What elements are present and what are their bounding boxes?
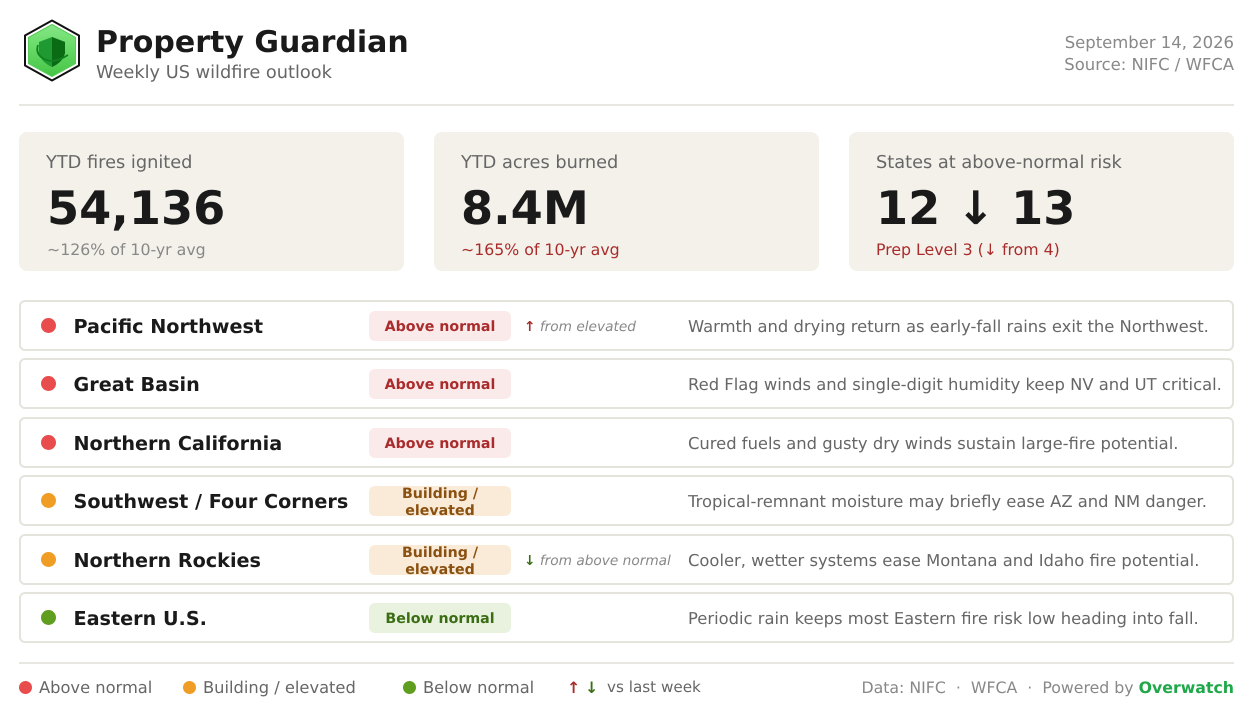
- footer: [19, 662, 1234, 716]
- label: States at above-normal risk: [876, 152, 1122, 172]
- status pill: Building /: [402, 544, 478, 560]
- legend label: Above normal: [39, 678, 152, 697]
- region name: Northern Rockies: [74, 549, 261, 572]
- legend dot: [183, 681, 196, 694]
- date and source: September 14, 2026: [1065, 33, 1234, 52]
- legend dot: [19, 681, 32, 694]
- status dot: [41, 493, 56, 508]
- row: Pacific Northwest: [19, 300, 1234, 351]
- legend dot: [403, 681, 416, 694]
- legend label: Below normal: [423, 678, 534, 697]
- subtitle: Weekly US wildfire outlook: [96, 63, 332, 83]
- status pill: Above normal: [385, 436, 495, 452]
- region name: Northern California: [74, 432, 282, 455]
- arrow down: ↓: [585, 678, 598, 697]
- status pill: [369, 486, 511, 516]
- status dot: [41, 435, 56, 450]
- label: YTD fires ignited: [46, 152, 192, 172]
- legend: below normal: [403, 678, 534, 697]
- panel: YTD fires ignited: [19, 132, 404, 271]
- status pill: elevated: [405, 562, 475, 578]
- status pill: elevated: [405, 502, 475, 518]
- header: [19, 15, 1234, 106]
- status pill: Building /: [402, 486, 478, 502]
- date and source: Source: NIFC / WFCA: [1064, 55, 1234, 74]
- status dot: [41, 318, 56, 333]
- title: Property Guardian: [96, 24, 409, 60]
- description: Periodic rain keeps most Eastern fire risk low heading into fall.: [688, 609, 1199, 628]
- legend: above normal: [19, 678, 152, 697]
- status pill: Below normal: [385, 611, 495, 627]
- value: 54,136: [47, 181, 225, 235]
- row: Great Basin: [19, 358, 1234, 409]
- row: Southwest / Four Corners: [19, 475, 1234, 526]
- row: Eastern U.S.: [19, 592, 1234, 643]
- legend: change arrows: [567, 678, 701, 697]
- region name: Pacific Northwest: [74, 315, 263, 338]
- panel: States at above-normal risk: [849, 132, 1234, 271]
- arrow up: ↑: [567, 678, 580, 697]
- legend: building: [183, 678, 356, 697]
- note: Prep Level 3 (↓ from 4): [876, 240, 1060, 259]
- label: YTD acres burned: [461, 152, 618, 172]
- status pill: [369, 428, 511, 458]
- status pill: [369, 603, 511, 633]
- change note: ↑ from elevated: [524, 318, 636, 334]
- note: ~126% of 10-yr avg: [47, 240, 206, 259]
- value: 12 ↓ 13: [876, 181, 1075, 235]
- description: Warmth and drying return as early-fall rains exit the Northwest.: [688, 317, 1209, 336]
- footer credits: Data: NIFC · WFCA · Powered by Overwatch: [861, 678, 1234, 697]
- status dot: [41, 610, 56, 625]
- region name: Southwest / Four Corners: [74, 490, 348, 513]
- legend label: vs last week: [607, 678, 701, 696]
- description: Cooler, wetter systems ease Montana and Idaho fire potential.: [688, 551, 1199, 570]
- description: Tropical-remnant moisture may briefly ease AZ and NM danger.: [688, 492, 1207, 511]
- status dot: [41, 376, 56, 391]
- date and source: [1064, 33, 1234, 74]
- row: Northern Rockies: [19, 534, 1234, 585]
- status pill: [369, 311, 511, 341]
- description: Red Flag winds and single-digit humidity keep NV and UT critical.: [688, 375, 1222, 394]
- region name: Eastern U.S.: [74, 607, 207, 630]
- status pill: Above normal: [385, 377, 495, 393]
- description: Cured fuels and gusty dry winds sustain large-fire potential.: [688, 434, 1178, 453]
- status pill: [369, 545, 511, 575]
- value: 8.4M: [461, 181, 589, 235]
- note: ~165% of 10-yr avg: [461, 240, 620, 259]
- row: Northern California: [19, 417, 1234, 468]
- legend label: Building / elevated: [203, 678, 356, 697]
- change note: ↓ from above normal: [524, 552, 671, 568]
- panel: YTD acres burned: [434, 132, 819, 271]
- status dot: [41, 552, 56, 567]
- status pill: [369, 369, 511, 399]
- status pill: Above normal: [385, 319, 495, 335]
- icon: shield logo: [24, 20, 80, 82]
- region name: Great Basin: [74, 373, 200, 396]
